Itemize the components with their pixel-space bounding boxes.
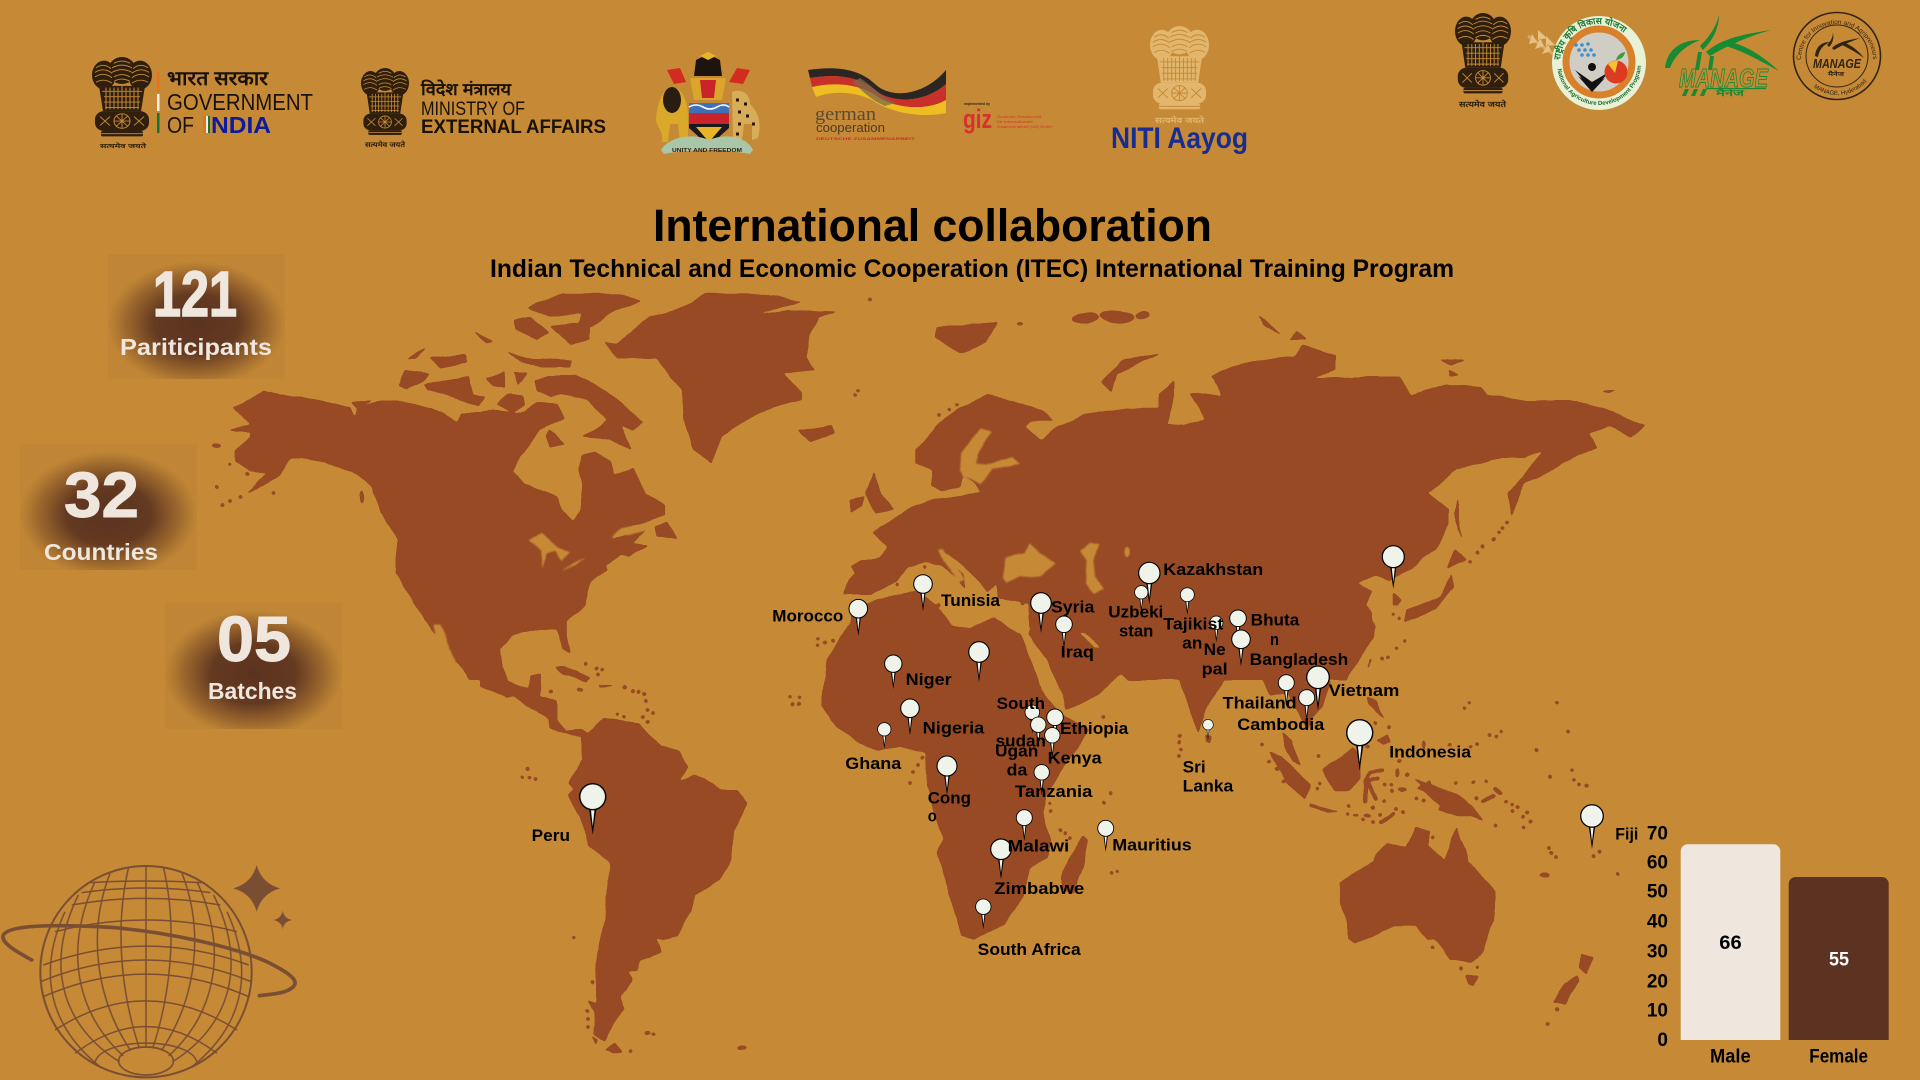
logo: NITI Aayog: NITI Aayog [1111,122,1248,155]
label: Mauritius: Mauritius [1112,836,1192,855]
logo: Malawi coat of arms [656,52,760,154]
logo: MANAGE: MANAGE [1679,63,1768,93]
label: Tajikistan: an [1182,633,1202,652]
label: Iraq: Iraq [1061,643,1094,662]
label: Congo [928,788,971,826]
pin: Nigeria [901,699,919,736]
logo: giz: giz [963,104,992,134]
label: Syria: Syria [1051,598,1095,617]
logo: NITI Aayog [1111,26,1248,155]
label: South Africa: South Africa [978,940,1081,959]
map: South and East Asia [1100,520,1448,750]
logo: Centre for Innovation and Agripreneurship, MANAGE [1792,12,1882,100]
logo: giz [963,101,1052,134]
logo: Ministry of External Affairs: सत्यमेव जयते [364,140,406,149]
map: Central and South America [480,660,748,1053]
pin: Mauritius [1098,820,1114,852]
label: Tajikistan [1163,614,1224,652]
map: Africa and Middle East [822,553,1177,940]
stat: batches: Batches [208,678,297,704]
chart y axis: 20 [1647,971,1668,992]
pin: Kenya [1045,728,1060,758]
stat: batches [165,603,342,729]
pin: Sri Lanka [1203,719,1213,740]
map: North America and Arctic [212,293,840,680]
logo: National Agriculture Development Programme [1527,16,1646,110]
label: Sri Lanka: Lanka [1183,777,1234,796]
logo: german cooperation [808,68,946,141]
stat: countries: Countries [44,539,158,565]
label: Zimbabwe: Zimbabwe [994,879,1084,898]
logo: german cooperation: cooperation [816,120,885,135]
pin: Iraq [1056,616,1072,649]
label: Nepal [1202,640,1228,678]
label: Thailand: Thailand [1223,694,1297,713]
country labels [532,560,1638,959]
logo: national emblem, top right [1455,13,1511,109]
logo: giz: implemented by [964,101,991,106]
label: Congo: Cong [928,788,971,807]
label: Kenya: Kenya [1048,748,1102,767]
category: female: Female [1809,1046,1868,1067]
label: South sudan: sudan [996,732,1046,751]
label: Nepal: pal [1202,659,1228,678]
pin: Cambodia [1299,690,1315,721]
logo: Centre for Innovation and Agripreneurship, MANAGE: MANAGE, Hyderabad [1814,78,1866,96]
pin: unlabelled North Africa [969,642,989,682]
pin: Fiji [1581,805,1603,849]
pin: Ethiopia [1047,709,1063,742]
title: International collaboration [653,200,1212,251]
logo: NITI Aayog: सत्यमेव जयते [1154,115,1205,125]
logo: giz: Deutsche Gesellschaft [997,114,1042,119]
logo: Government of India: भारत सरकार [167,68,269,90]
stat: batches: 05 [217,603,291,675]
logo: Ministry of External Affairs: EXTERNAL AFFAIRS [421,117,606,138]
pin: Tajikistan [1180,588,1194,615]
logo: Government of India: OF [167,112,194,138]
pin: Nepal [1210,616,1223,642]
subtitle: Indian Technical and Economic Cooperation (ITEC) International Training Program [490,255,1454,283]
logo: Government of India: सत्यमेव जयते [98,142,147,150]
label: South sudan [996,694,1046,751]
label: Tajikistan: Tajikist [1163,614,1224,633]
logo: Centre for Innovation and Agripreneurship, MANAGE: मैनेज [1827,70,1845,78]
chart y axis: 30 [1647,942,1668,963]
stat: participants: 121 [153,258,237,330]
label: Cambodia: Cambodia [1237,715,1325,734]
pin: Syria [1031,593,1051,633]
label: Tanzania: Tanzania [1015,782,1093,801]
label: Nepal: Ne [1204,640,1226,659]
map: land masses [212,293,1645,1053]
logo: Ministry of External Affairs [361,68,606,149]
label: Uganda [995,742,1038,780]
logo: Centre for Innovation and Agripreneurship, MANAGE: MANAGE [1813,56,1861,71]
logo: german cooperation: DEUTSCHE ZUSAMMENARBEIT [816,136,916,141]
pin: Zimbabwe [991,839,1011,879]
pin: Peru [580,784,606,835]
label: Uganda: Ugan [995,742,1038,761]
pin: Malawi [1016,810,1032,841]
pin: North-East Asia [1382,546,1404,589]
logo: giz: Zusammenarbeit (GIZ) GmbH [997,124,1052,129]
chart y axis: 0 [1657,1030,1668,1051]
stat: countries: 32 [64,459,139,531]
pin: Bangladesh [1232,630,1250,667]
chart y axis [1647,823,1668,1051]
stat: countries [20,444,197,570]
map: inland seas and lakes [434,428,1129,663]
map: Eurasia [845,311,1645,680]
logo: giz: für Internationale [997,119,1034,124]
label: Uzbekistan: Uzbeki [1108,603,1163,622]
pin: Ghana [878,723,891,749]
pin: Uzbekistan [1135,586,1148,612]
map: scattered small islands [217,300,1618,1051]
label: Sri Lanka: Sri [1183,757,1206,776]
stat: participants [108,254,285,379]
label: Uzbekistan: stan [1119,622,1153,641]
logo: german cooperation: german [815,104,877,125]
pin: Niger [885,655,902,689]
logo: Malawi coat of arms: UNITY AND FREEDOM [672,148,742,154]
logo: Ministry of External Affairs: MINISTRY OF [421,99,525,120]
chart y axis: 60 [1647,852,1668,873]
label: Tunisia: Tunisia [941,591,1001,610]
label: Fiji: Fiji [1615,824,1638,843]
map: Australia, Indonesia and Oceania [1270,732,1594,1005]
label: Peru: Peru [532,826,570,845]
logo: National Agriculture Development Programme: राष्ट्रीय कृषि विकास योजना [1554,17,1628,60]
label: Sri Lanka [1183,757,1234,796]
pin: Tunisia [914,575,932,611]
label: Bhutan: n [1270,630,1279,649]
label: Vietnam: Vietnam [1329,681,1399,700]
chart y axis: 10 [1647,1001,1668,1022]
label: Bhutan: Bhuta [1251,611,1300,630]
label: Ethiopia: Ethiopia [1060,719,1129,738]
label: Nigeria: Nigeria [923,718,985,737]
chart y axis: 50 [1647,882,1668,903]
bar chart: male and female participants [1647,823,1889,1067]
value: male: 66 [1719,933,1742,954]
pin: Uganda [1031,717,1046,747]
label: Uzbekistan [1108,603,1163,641]
value: female: 55 [1829,949,1849,970]
label: South sudan: South [997,694,1045,713]
category: male: Male [1710,1046,1751,1067]
label: Kazakhstan: Kazakhstan [1163,560,1263,579]
label: Niger: Niger [906,670,952,689]
label: Morocco: Morocco [772,607,843,626]
pin: South Sudan [1025,705,1040,734]
logo: national emblem, top right: सत्यमेव जयते [1458,99,1507,109]
pin: Congo [937,756,957,795]
chart y axis: 70 [1647,823,1668,844]
label: Indonesia: Indonesia [1389,743,1472,762]
pin: Vietnam [1307,666,1329,710]
pin: Indonesia [1347,720,1373,771]
pin: Tanzania [1034,765,1049,795]
pin: Bhutan [1230,610,1246,643]
bar: male [1681,844,1780,1040]
logo: Government of India [92,57,313,150]
label: Uganda: da [1007,761,1028,780]
bar: female [1789,877,1889,1040]
logo: Government of India: NDIA [211,112,271,138]
pin: Kazakhstan [1139,562,1160,604]
label: Congo: o [928,807,937,826]
label: Bangladesh: Bangladesh [1250,650,1348,669]
stat: participants: Pariticipants [120,334,272,360]
pin: Morocco [849,599,868,636]
chart y axis: 40 [1647,912,1668,933]
pin: Thailand [1278,675,1294,706]
logo: Ministry of External Affairs: विदेश मंत्रालय [420,79,512,99]
pin: South Africa [976,899,991,929]
label: Ghana: Ghana [845,754,902,773]
logo: Government of India: GOVERNMENT [167,89,313,115]
label: Bhutan [1251,611,1300,649]
decorative globe with ring and stars [3,865,295,1077]
logo: MANAGE [1665,15,1779,98]
label: Malawi: Malawi [1008,837,1069,856]
logo: MANAGE: मैनेज [1714,87,1745,98]
world map [212,293,1645,1053]
